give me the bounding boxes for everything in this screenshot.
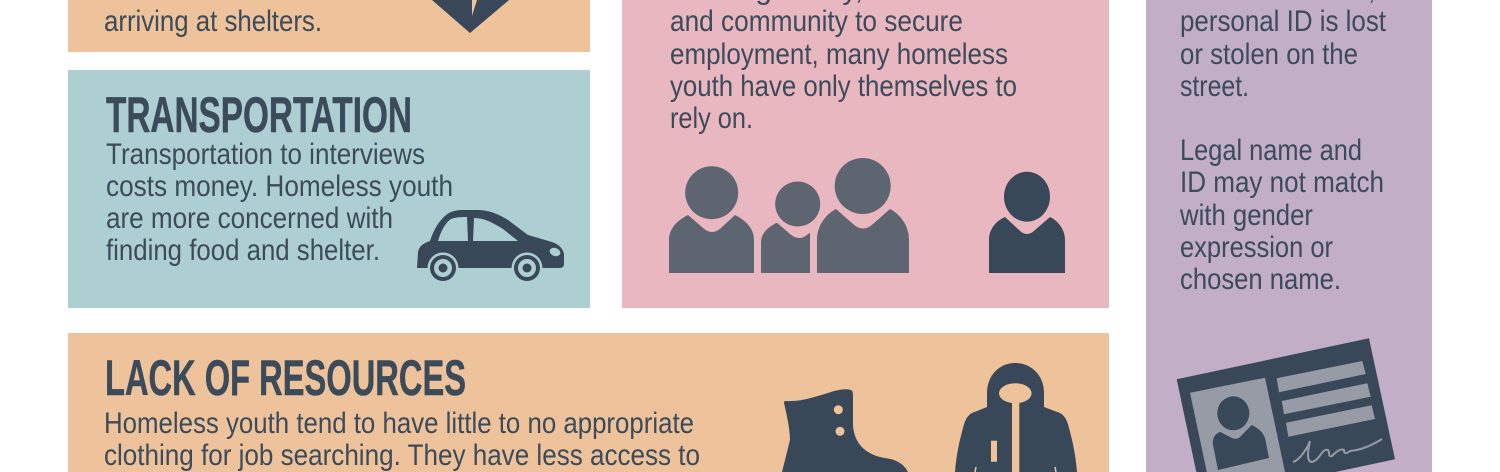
text block: transportation body: are more concerned with [106, 202, 393, 235]
heading: lack of resources: LACK OF RESOURCES [105, 350, 466, 406]
text block: lost ID: or stolen on the [1180, 38, 1358, 71]
text block: lost ID [1180, 0, 1387, 103]
icon: car [417, 210, 564, 284]
text block: legal name: ID may not match [1180, 166, 1384, 199]
panel: transportation [68, 70, 590, 308]
text block: transportation body [106, 138, 453, 267]
text: arriving at shelters: arriving at shelters. [104, 5, 322, 38]
panel: shelters (cropped orange) [68, 0, 590, 52]
panel: lack of resources [68, 333, 1109, 472]
icon: boot [782, 389, 908, 472]
text block: transportation body: costs money. Homeless youth [106, 170, 453, 203]
text block: legal name [1179, 134, 1384, 296]
text block: support body: and community to secure [670, 5, 963, 38]
text block: legal name: chosen name. [1180, 263, 1341, 296]
text block: resources body: clothing for job searching. They have less access to [104, 439, 700, 472]
text block: legal name: Legal name and [1180, 134, 1362, 167]
text block: transportation body: finding food and shelter. [106, 234, 380, 267]
text block: transportation body: Transportation to interviews [106, 138, 425, 171]
icon: family group [669, 158, 909, 273]
text block: support body: employment, many homeless [670, 38, 1008, 71]
text block: support body: rely on. [670, 102, 753, 135]
text block: support body [670, 0, 1017, 135]
text block: support body: youth have only themselves to [670, 70, 1017, 103]
icon: ID card [1177, 338, 1395, 472]
text block: lost ID: personal ID is lost [1180, 5, 1387, 38]
text block: lost ID: street. [1180, 70, 1249, 103]
text block: resources body: Homeless youth tend to have little to no appropriate [104, 407, 694, 440]
icon: hooded jacket [955, 363, 1077, 472]
icon: cropped diamond [432, 0, 509, 33]
heading: transportation: TRANSPORTATION [106, 87, 412, 143]
text block: legal name: with gender [1179, 199, 1313, 232]
panel: identification (purple) [1146, 0, 1432, 472]
icon: lone person [989, 172, 1065, 273]
panel: lack of support (pink) [622, 0, 1109, 308]
text block: resources body [104, 407, 700, 472]
text block: legal name: expression or [1180, 231, 1333, 264]
